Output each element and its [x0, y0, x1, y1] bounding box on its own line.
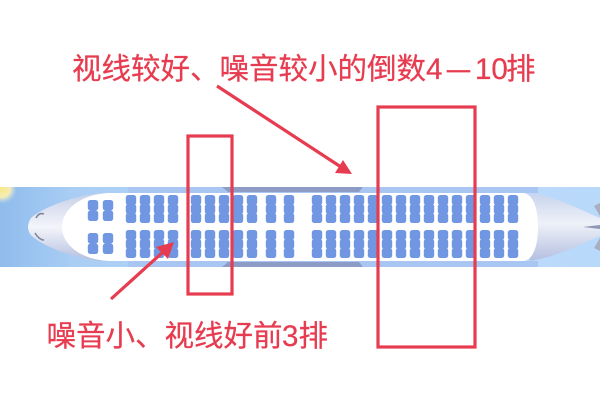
- seats: economy cabin upper rows: [126, 195, 518, 223]
- arrow: top label to rear rows: [217, 86, 352, 174]
- heading: front rows label: 3: [282, 320, 298, 353]
- heading: rear rows label: 视线较好、噪音较小的倒数: [72, 53, 426, 86]
- heading: rear rows label: 排: [506, 53, 536, 86]
- sky band background: [0, 187, 600, 267]
- heading: rear rows label: 4: [426, 53, 442, 86]
- tail fin: [583, 225, 600, 229]
- wing walkway bars: [222, 187, 363, 192]
- highlight box: wing row area: [188, 136, 232, 294]
- infographic: aircraft seat map: [0, 54, 600, 349]
- heading: front rows label: 排: [298, 320, 328, 353]
- airplane body: [28, 187, 600, 267]
- tail cone: [530, 193, 600, 261]
- seats: front cabin: [88, 200, 113, 254]
- highlight box: rear rows: [378, 107, 475, 347]
- nose cone: [28, 193, 100, 261]
- heading: rear rows label: 10: [475, 53, 508, 86]
- heading: rear rows label: —: [447, 56, 470, 82]
- windshield: [35, 214, 44, 240]
- arrow: bottom label to front rows: [111, 242, 174, 299]
- seats: economy cabin lower rows: [126, 230, 518, 258]
- heading: front rows label: 噪音小、视线好前: [46, 320, 283, 353]
- cabin floor: [62, 193, 538, 261]
